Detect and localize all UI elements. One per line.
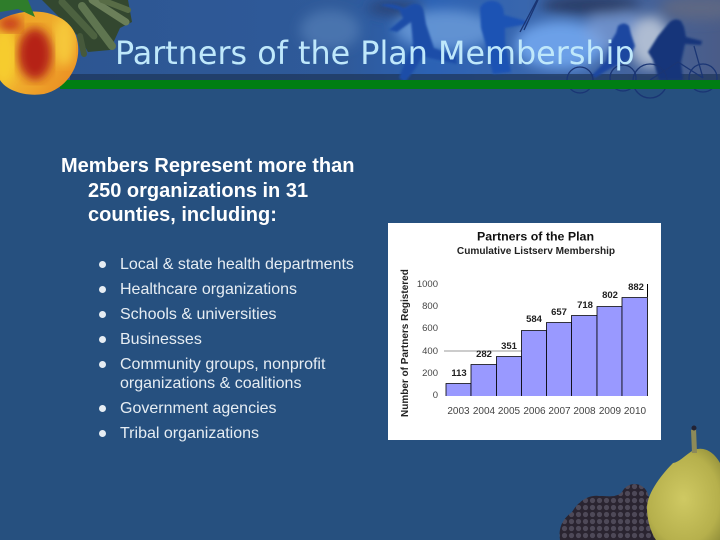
bar chart: cumulative listserv membership: 657 [551, 307, 567, 318]
bullet list: Community groups, nonprofit [120, 356, 325, 373]
bar chart: cumulative listserv membership: 882 [628, 282, 644, 293]
bar chart: cumulative listserv membership: 200 [422, 368, 438, 379]
blackberries [560, 484, 660, 540]
bar chart: cumulative listserv membership: 2003 [447, 406, 470, 417]
intro text: Members Represent more than [61, 155, 354, 177]
bullet list: Schools & universities [120, 306, 277, 323]
bullet list: organizations & coalitions [120, 375, 301, 392]
bar chart: cumulative listserv membership: 351 [501, 341, 518, 352]
bar chart: cumulative listserv membership: 584 [526, 314, 543, 325]
bar chart: cumulative listserv membership: 2007 [548, 406, 571, 417]
pear [647, 449, 720, 540]
bullet list [99, 256, 354, 442]
asparagus [42, 0, 132, 54]
bullet list: Healthcare organizations [120, 281, 297, 298]
bar chart: cumulative listserv membership: 282 [476, 349, 492, 360]
bar chart: cumulative listserv membership: 2004 [473, 406, 496, 417]
bullet list: Businesses [120, 331, 202, 348]
header banner [0, 0, 720, 98]
bar chart: cumulative listserv membership: Cumulative Listserv Membership [457, 246, 615, 257]
bar chart: cumulative listserv membership: 2010 [624, 406, 647, 417]
silhouettes: runner, swing child, cyclists [380, 1, 702, 82]
intro text: 250 organizations in 31 [88, 180, 308, 202]
bar chart: cumulative listserv membership: 600 [422, 323, 438, 334]
bullet list: Local & state health departments [120, 256, 354, 273]
intro text [61, 155, 354, 226]
bullet list: Government agencies [120, 400, 277, 417]
bar chart: cumulative listserv membership: 0 [433, 390, 438, 401]
bar chart: cumulative listserv membership: 113 [451, 368, 467, 379]
bar chart: cumulative listserv membership: 2005 [498, 406, 521, 417]
bar chart: cumulative listserv membership: 800 [422, 301, 438, 312]
bars [446, 298, 648, 396]
green rule [60, 80, 720, 89]
bar chart: cumulative listserv membership [388, 223, 661, 440]
bar chart: cumulative listserv membership: 2008 [573, 406, 596, 417]
peach [0, 12, 78, 95]
bar chart: cumulative listserv membership: 718 [577, 300, 593, 311]
bar chart: cumulative listserv membership: 400 [422, 346, 438, 357]
bar chart: cumulative listserv membership: 2009 [599, 406, 622, 417]
leaf [0, 0, 35, 17]
bullet list: Tribal organizations [120, 425, 259, 442]
bar chart: cumulative listserv membership: Partners of the Plan [477, 230, 594, 244]
pear stem [691, 428, 697, 453]
bar chart: cumulative listserv membership: Number of Partners Registered [400, 269, 411, 417]
title: Partners of the Plan Membership [115, 35, 635, 72]
fruit: blackberries and pear [560, 426, 720, 540]
intro text: counties, including: [88, 204, 277, 226]
bar chart: cumulative listserv membership: 1000 [417, 279, 438, 290]
bar chart: cumulative listserv membership: 802 [602, 290, 618, 301]
bar chart: cumulative listserv membership: 2006 [523, 406, 546, 417]
